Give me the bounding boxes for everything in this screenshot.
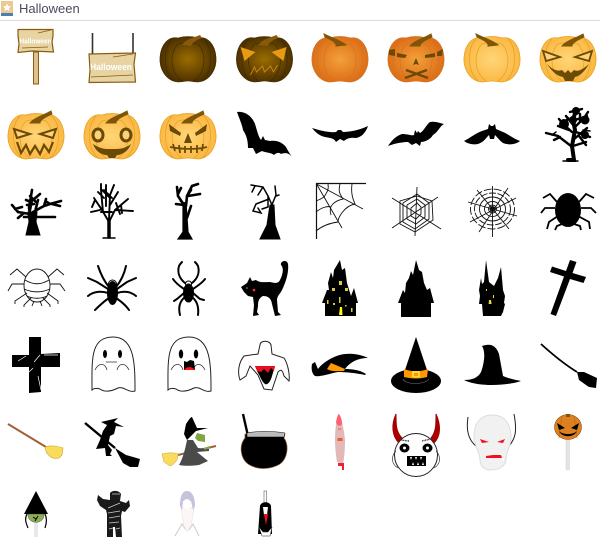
sign: hanging sign	[89, 33, 136, 82]
icon: library star	[1, 1, 13, 16]
tree: bare branching	[91, 184, 133, 238]
tree: leafy dead tree	[546, 107, 590, 161]
spider: curled legs	[173, 262, 205, 315]
sign: post sign	[18, 30, 54, 84]
pumpkin: yellow	[464, 34, 520, 82]
pumpkin: yellow toothy	[540, 34, 596, 82]
witch hat: tall buckle	[391, 337, 441, 393]
witch hat: bent	[464, 345, 521, 385]
broom: straw	[8, 424, 63, 458]
leaning cross	[550, 260, 586, 316]
ghost: fanged	[239, 341, 289, 390]
ghost: plain	[92, 337, 135, 391]
tree: twisted	[251, 185, 280, 239]
severed finger	[335, 414, 345, 470]
cauldron	[241, 414, 287, 468]
pumpkin: dark	[160, 35, 216, 82]
spider: fat black	[541, 193, 596, 230]
title: Halloween	[19, 1, 80, 16]
vampire face	[467, 414, 516, 470]
pumpkin: jagged mouth	[8, 111, 64, 159]
spider: long legs	[88, 266, 136, 310]
green witch lollipop	[24, 491, 48, 537]
pumpkin: round eyes	[84, 111, 140, 159]
sign: hanging sign: Halloween	[90, 62, 132, 73]
spider web: hexagon	[392, 187, 441, 236]
header bar	[0, 1, 600, 21]
spider web: corner	[316, 183, 366, 239]
mummy	[97, 491, 130, 537]
haunted house: windows	[322, 260, 358, 316]
ghost girl	[175, 491, 199, 536]
pumpkin lollipop	[554, 414, 582, 470]
witch: silhouette on broom	[85, 418, 140, 467]
tree: gnarled tall	[176, 184, 200, 239]
sign: post sign: Halloween	[20, 36, 52, 46]
black cat	[241, 261, 288, 316]
pumpkin: dark carved	[236, 35, 293, 82]
bat: flying	[388, 122, 444, 146]
bat: wide	[312, 126, 368, 142]
bat: perched wing	[237, 112, 292, 157]
spider: outline	[8, 269, 65, 307]
pumpkin: stitched mouth	[160, 111, 216, 159]
witch hat: swept	[312, 354, 368, 376]
haunted house: silhouette	[398, 260, 434, 317]
broom: black	[541, 344, 597, 388]
cracked cross	[12, 337, 60, 393]
haunted tower	[479, 260, 505, 316]
witch: coloured on broom	[162, 417, 216, 466]
ghost: screaming	[168, 337, 211, 391]
pumpkin: orange	[312, 34, 368, 82]
sadako figure	[258, 491, 272, 536]
tree: stout dead tree	[12, 190, 61, 235]
pumpkin: orange carved	[388, 34, 444, 82]
devil mask	[392, 414, 440, 476]
bat: hanging	[464, 124, 520, 144]
spider web: dense	[468, 186, 517, 237]
